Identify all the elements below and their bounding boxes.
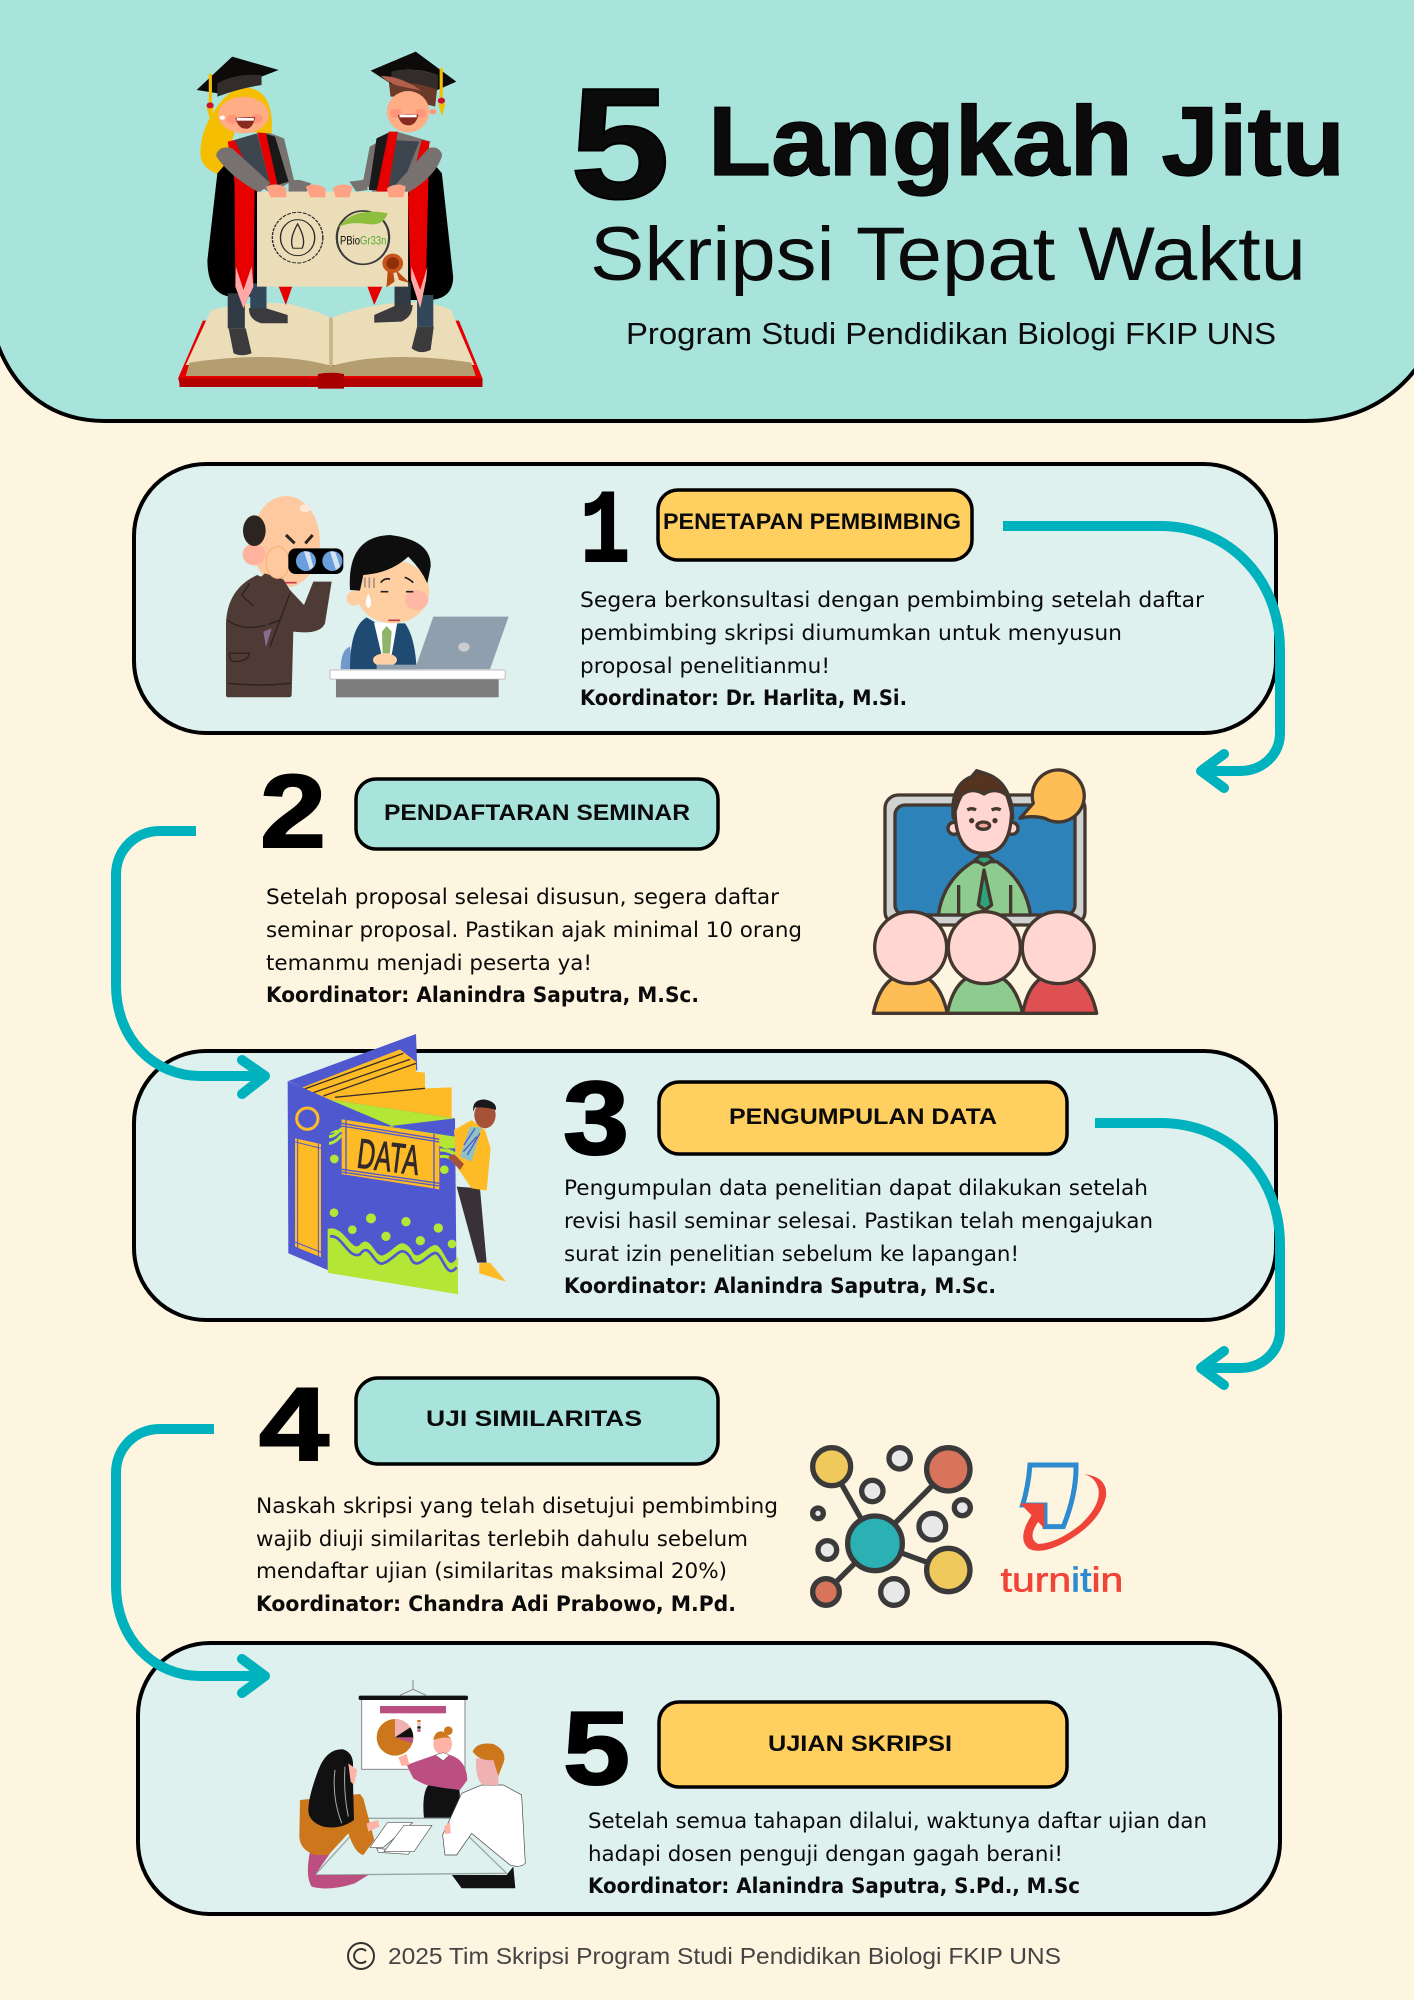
step text: Segera berkonsultasi dengan pembimbing setelah daftar xyxy=(580,588,1204,613)
step text: pembimbing skripsi diumumkan untuk menyusun xyxy=(580,621,1122,646)
step text xyxy=(580,588,1204,711)
arrow: step 2 to step 3 xyxy=(116,831,265,1094)
step label xyxy=(356,779,718,849)
step text: proposal penelitianmu! xyxy=(580,654,830,679)
certificate scroll xyxy=(257,185,410,287)
step text: Koordinator: Alanindra Saputra, M.Sc. xyxy=(266,983,699,1008)
step number: 2 xyxy=(260,754,326,870)
step text xyxy=(564,1176,1153,1299)
step text: Naskah skripsi yang telah disetujui pembimbing xyxy=(256,1494,778,1519)
step text: Pengumpulan data penelitian dapat dilakukan setelah xyxy=(564,1176,1148,1201)
graduate right xyxy=(349,52,456,352)
subtitle: Skripsi Tepat Waktu xyxy=(590,212,1306,297)
step text: Setelah semua tahapan dilalui, waktunya daftar ujian dan xyxy=(588,1809,1207,1834)
step text: Setelah proposal selesai disusun, segera daftar xyxy=(266,885,779,910)
step text: revisi hasil seminar selesai. Pastikan telah mengajukan xyxy=(564,1209,1153,1234)
step text: mendaftar ujian (similaritas maksimal 20%) xyxy=(256,1559,727,1584)
title number: 5 xyxy=(570,56,670,232)
PBioGr33n logo xyxy=(337,211,389,264)
illustration: thesis defence meeting xyxy=(299,1680,525,1889)
step text: seminar proposal. Pastikan ajak minimal 10 orang xyxy=(266,918,802,943)
illustration: graduates on open book xyxy=(178,52,482,389)
panel: step 3 xyxy=(134,1034,1276,1320)
illustration: data binder and person xyxy=(288,1034,506,1293)
header panel xyxy=(0,0,1414,421)
arrow: step 1 to step 2 xyxy=(1003,526,1280,788)
program name: Program Studi Pendidikan Biologi FKIP UNS xyxy=(626,316,1276,351)
label text DATA: DATA xyxy=(355,1130,422,1184)
arrow: step 3 to step 4 xyxy=(1095,1123,1280,1385)
step text: Koordinator: Chandra Adi Prabowo, M.Pd. xyxy=(256,1592,736,1617)
panel: step 1 xyxy=(134,464,1276,733)
book xyxy=(178,302,482,389)
illustration: boss watching student with binoculars xyxy=(226,496,509,697)
university seal xyxy=(272,212,323,263)
step label: UJIAN SKRIPSI xyxy=(768,1731,952,1756)
logo: turnitin xyxy=(1001,1465,1123,1600)
step label: PENETAPAN PEMBIMBING xyxy=(663,509,961,534)
step text: wajib diuji similaritas terlebih dahulu sebelum xyxy=(256,1527,748,1552)
panel: step 4 xyxy=(256,1367,1123,1617)
step text: Koordinator: Dr. Harlita, M.Si. xyxy=(580,686,907,711)
graduate left xyxy=(197,57,311,355)
icon: copyright xyxy=(348,1943,374,1969)
step label xyxy=(356,1378,718,1464)
icon: network nodes xyxy=(813,1448,970,1605)
step text: surat izin penelitian sebelum ke lapangan! xyxy=(564,1242,1019,1267)
copyright text: 2025 Tim Skripsi Program Studi Pendidikan Biologi FKIP UNS xyxy=(388,1943,1061,1969)
illustration: online seminar xyxy=(873,770,1097,1013)
step number: 5 xyxy=(563,1691,630,1807)
step text: Koordinator: Alanindra Saputra, S.Pd., M.Sc xyxy=(588,1874,1080,1899)
step label: PENDAFTARAN SEMINAR xyxy=(384,800,690,825)
step number: 1 xyxy=(580,475,630,593)
logo: turnitin: turnitin xyxy=(1001,1562,1123,1600)
step label xyxy=(659,1082,1067,1154)
PBioGr33n logo: PBioGr33n xyxy=(340,234,386,248)
panel: step 2 xyxy=(260,754,1097,1013)
arrow: step 4 to step 5 xyxy=(116,1429,265,1693)
step number: 3 xyxy=(563,1061,629,1177)
step text xyxy=(266,885,802,1008)
footer xyxy=(348,1943,1061,1969)
wax seal ribbon xyxy=(382,254,410,287)
step label xyxy=(658,490,972,560)
step label: PENGUMPULAN DATA xyxy=(729,1104,997,1129)
step label xyxy=(659,1702,1067,1787)
step text xyxy=(256,1494,778,1617)
step text: Koordinator: Alanindra Saputra, M.Sc. xyxy=(564,1274,996,1299)
step label: UJI SIMILARITAS xyxy=(426,1406,642,1431)
title: Langkah Jitu xyxy=(708,86,1345,196)
step number: 4 xyxy=(259,1367,329,1483)
step text: hadapi dosen penguji dengan gagah berani! xyxy=(588,1842,1063,1867)
step text: temanmu menjadi peserta ya! xyxy=(266,951,592,976)
panel: step 5 xyxy=(138,1643,1280,1914)
step text xyxy=(588,1809,1207,1899)
